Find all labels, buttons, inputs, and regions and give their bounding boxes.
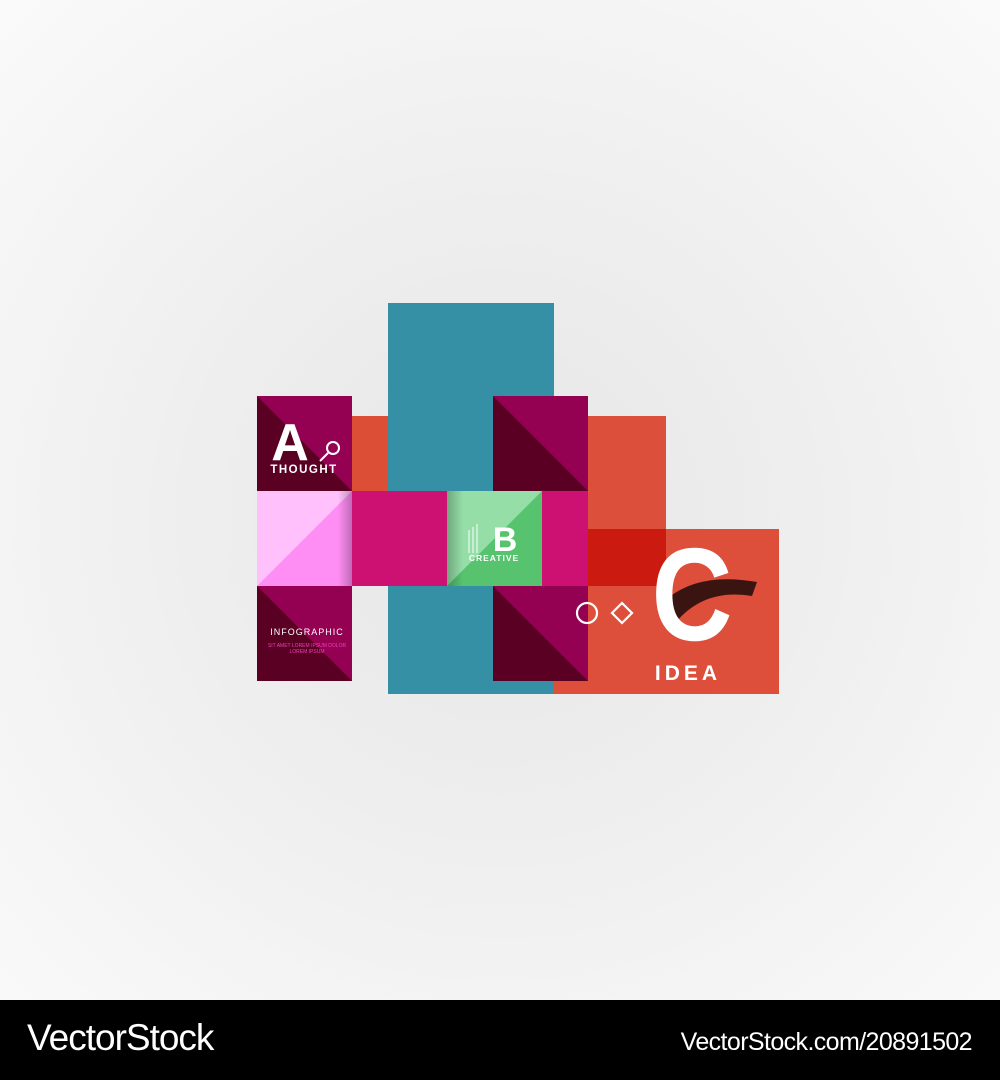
- tile bottom left infographic: LOREM IPSUM: [289, 649, 325, 655]
- letter C: IDEA: [655, 662, 721, 685]
- tile A: THOUGHT: [270, 464, 338, 476]
- tile A: [257, 396, 352, 491]
- orange C panel: [553, 529, 779, 694]
- green tile B: CREATIVE: [469, 553, 519, 563]
- letter C: C: [652, 520, 732, 668]
- orange block behind A: [352, 416, 388, 491]
- footer: VectorStock.com/20891502: [681, 1028, 972, 1056]
- letter C: [652, 520, 757, 685]
- footer: VectorStock: [27, 1017, 213, 1058]
- teal tall column: [388, 303, 554, 694]
- magenta band: [352, 491, 588, 586]
- red overlap: [588, 529, 666, 586]
- orange tall right block: [553, 416, 666, 694]
- tile bottom left infographic: INFOGRAPHIC: [270, 627, 344, 637]
- pink tile: [257, 491, 352, 586]
- tile right bottom: [493, 586, 588, 681]
- footer: [0, 1000, 1000, 1080]
- icon: circle and diamond: [577, 603, 632, 623]
- letter B: B: [493, 521, 517, 559]
- green tile B: [447, 491, 542, 586]
- tile bottom left infographic: SIT AMET LOREM IPSUM DOLOR: [268, 643, 346, 649]
- letter A: A: [271, 414, 309, 472]
- icon: magnifier: [320, 442, 339, 461]
- tile bottom left infographic: [257, 586, 352, 681]
- tile right top: [493, 396, 588, 491]
